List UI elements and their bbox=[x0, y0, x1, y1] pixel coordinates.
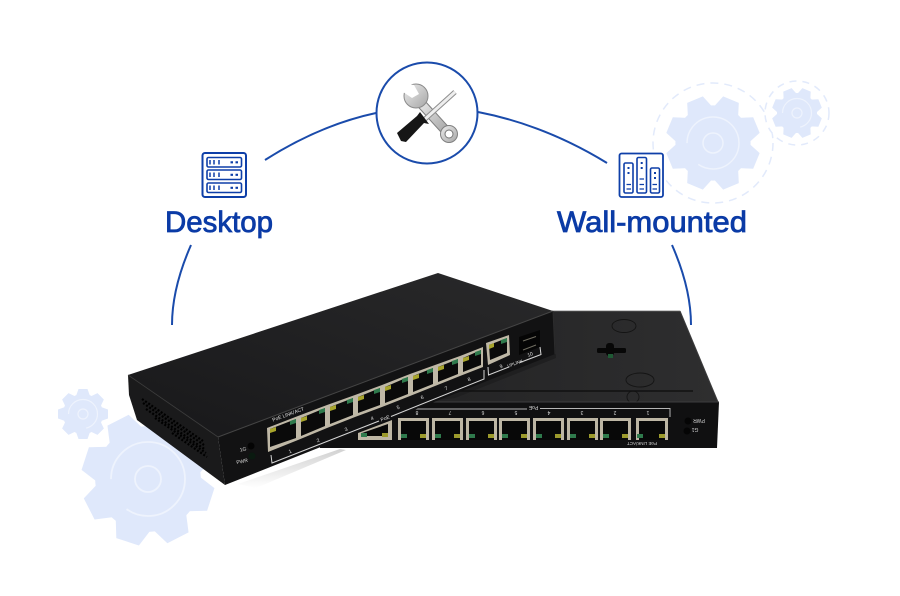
switch: wall-mounted unit (rear): 7 bbox=[448, 409, 451, 415]
switch: desktop unit (front): 1G bbox=[239, 446, 247, 454]
front face bbox=[218, 311, 555, 485]
heading: Wall-mounted: Wall-mounted bbox=[557, 206, 747, 239]
switch: wall-mounted unit (rear): 5 bbox=[514, 409, 517, 415]
top face bbox=[128, 273, 553, 437]
port numbers and labels: PoE LINK/ACT bbox=[272, 406, 305, 423]
port numbers and labels: 4 bbox=[370, 416, 375, 422]
port LEDs bbox=[270, 343, 494, 433]
floor shadow under desktop unit bbox=[238, 449, 346, 488]
switch: wall-mounted unit (rear): 3 bbox=[580, 409, 583, 415]
port numbers and labels: 5 bbox=[396, 405, 401, 411]
left side with vents bbox=[128, 375, 225, 485]
port numbers and labels: PoE bbox=[380, 414, 391, 423]
top face bbox=[400, 311, 718, 402]
port numbers and labels: 9 bbox=[499, 364, 504, 370]
port frames bbox=[267, 335, 510, 452]
gear: top right large bbox=[652, 82, 774, 204]
port numbers and labels: 7 bbox=[444, 386, 449, 392]
switch: wall-mounted unit (rear): PoE bbox=[528, 404, 538, 410]
rear ports bbox=[358, 418, 668, 440]
mount holes bbox=[612, 320, 654, 403]
status LEDs bbox=[248, 442, 254, 450]
gear: top right small bbox=[764, 80, 830, 146]
switch: wall-mounted unit (rear): 2 bbox=[613, 409, 616, 415]
front face bbox=[320, 402, 719, 448]
port numbers and labels: 6 bbox=[420, 395, 425, 401]
SFP slot bbox=[519, 330, 540, 355]
bracket and labels bbox=[400, 408, 670, 417]
switch: desktop unit (front): PWR bbox=[236, 458, 249, 466]
brackets bbox=[271, 370, 484, 463]
port numbers and labels: 2 bbox=[316, 438, 321, 444]
icon: screwdriver bbox=[397, 92, 455, 142]
icon: desktop server rack bbox=[202, 153, 246, 197]
port openings bbox=[270, 338, 507, 447]
switch: wall-mounted unit (rear): PWR bbox=[693, 417, 705, 423]
port numbers and labels bbox=[272, 351, 534, 455]
tools circle bbox=[376, 62, 478, 164]
port numbers and labels: 1 bbox=[288, 449, 293, 455]
icon: wall-mounted rack bbox=[620, 154, 663, 197]
connecting arcs bbox=[172, 112, 691, 325]
switch: desktop unit (front) bbox=[128, 273, 555, 485]
icon: wrench bbox=[401, 83, 458, 142]
switch: wall-mounted unit (rear): G1 bbox=[691, 426, 698, 432]
switch: wall-mounted unit (rear) bbox=[320, 311, 719, 448]
port numbers and labels: 3 bbox=[344, 427, 349, 433]
switch: wall-mounted unit (rear): PoE LINK/ACT bbox=[627, 441, 657, 446]
heading: Desktop: Desktop bbox=[165, 206, 273, 239]
port numbers and labels: 8 bbox=[467, 377, 472, 383]
gear: bottom left small bbox=[58, 389, 108, 439]
port numbers and labels: 10 bbox=[527, 351, 534, 359]
status LEDs bbox=[684, 418, 692, 424]
switch: wall-mounted unit (rear): 4 bbox=[547, 409, 550, 415]
switch: wall-mounted unit (rear): 8 bbox=[415, 409, 418, 415]
port numbers and labels: UPLINK bbox=[507, 358, 524, 369]
switch: wall-mounted unit (rear): 1 bbox=[646, 409, 649, 415]
switch: wall-mounted unit (rear): 6 bbox=[481, 409, 484, 415]
gear: bottom left large bbox=[65, 396, 231, 562]
keyhole cross bbox=[597, 343, 626, 358]
